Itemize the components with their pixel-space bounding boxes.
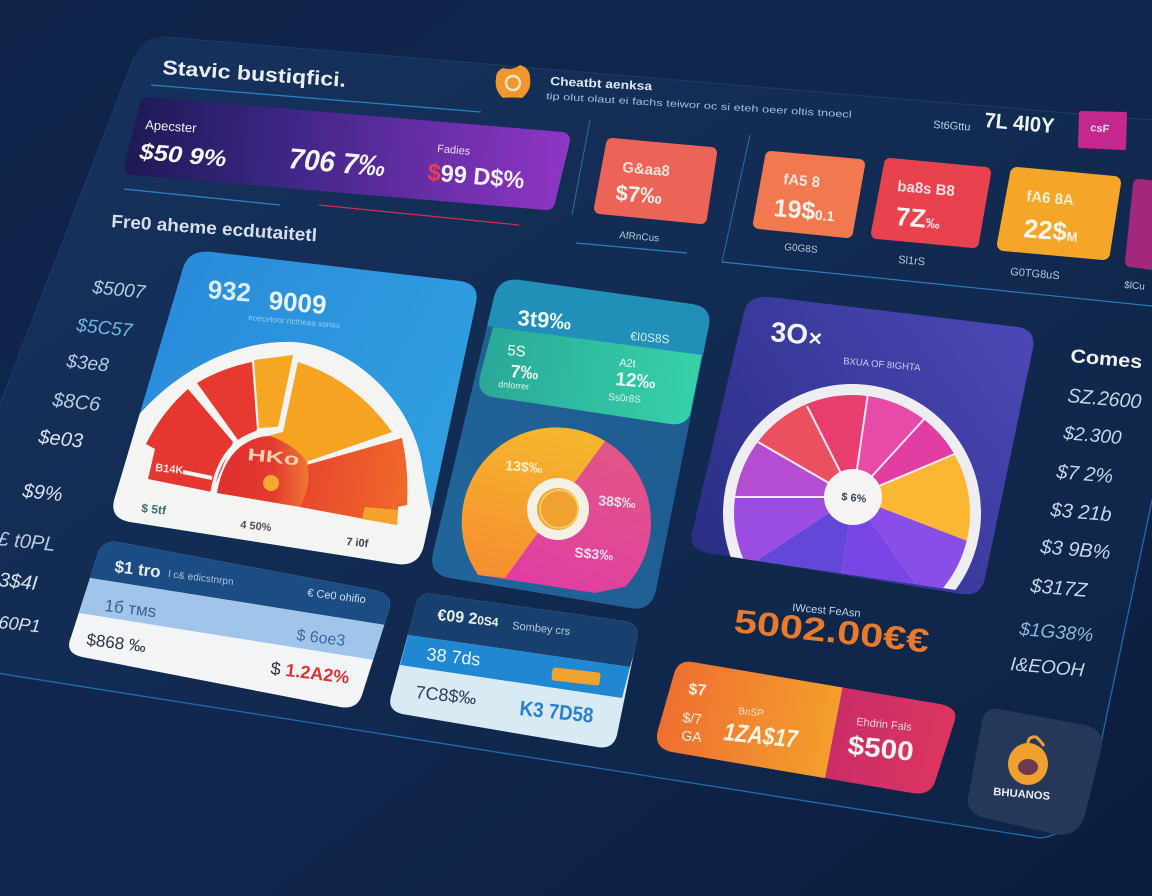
panel: purple wheel card: 3O✕ — [769, 316, 824, 352]
panel: gauge card: 9009 — [267, 285, 328, 320]
pie chart: 13$‰ — [505, 457, 543, 476]
metric card: red: ba8s B8 — [897, 178, 955, 200]
panel: donut column card: Ss0r8S — [608, 392, 642, 406]
panel: donut column card: €I0S8S — [630, 329, 670, 346]
panel: mid bottom card: 38 7ds — [426, 644, 481, 670]
panel: table card: $868 ‰ — [86, 630, 147, 656]
right value column: $3 9B% — [1039, 536, 1111, 564]
panel: gauge card — [113, 252, 477, 564]
title: Stavic bustiqfici. — [162, 57, 347, 92]
panel: table card: $ 6oe3 — [296, 627, 346, 650]
panel: gauge card: 4 50% — [240, 519, 272, 534]
pie chart: 38$‰ — [598, 492, 636, 511]
panel: orange and pink card: $/7 — [682, 709, 703, 727]
header group — [162, 57, 1125, 148]
panel: purple summary band: 706 7‰ — [287, 143, 387, 183]
panel: gauge card: HKo — [247, 445, 300, 469]
panel: table card: $ 1.2A2% — [270, 658, 350, 688]
panel: purple summary band — [132, 105, 562, 202]
panel: purple wheel card: BXUA OF 8IGHTA — [843, 356, 921, 374]
right value column: I&EOOH — [1010, 654, 1085, 681]
metric card: amber — [1004, 174, 1114, 282]
panel: gauge card: $ 5tf — [141, 501, 168, 518]
top teal strip — [487, 280, 710, 356]
panel: purple summary band: Apecster — [145, 117, 198, 136]
section heading: Fre0 aheme ecdutaitetl — [111, 211, 318, 245]
left value column — [0, 277, 148, 636]
panel: mid bottom card: K3 7D58 — [518, 697, 595, 728]
panel: mid bottom card — [390, 594, 638, 748]
metric card: red: 7Z‰ — [894, 201, 941, 235]
panel: donut column card: dnlorrer — [498, 379, 530, 392]
right value column: Comes — [1070, 346, 1143, 373]
panel: purple summary band: Fadies — [437, 143, 471, 158]
panel: orange and pink card: GA — [681, 727, 703, 745]
header value — [933, 109, 1055, 138]
panel: table card: l c& edicstnrpn — [168, 569, 234, 588]
divider lines — [124, 85, 687, 253]
gauge segment: red upper — [197, 362, 257, 440]
panel: mid bottom card: €09 20S4 — [437, 607, 500, 630]
metric card: orange: 19$0.1 — [772, 194, 836, 227]
panel: orange and pink card: Ehdrin Fals — [856, 716, 913, 734]
header caption: tip olut olaut ei fachs teiwor oc si eteh oeer oltis tnoecl — [546, 91, 852, 121]
panel: donut column card: A2t — [619, 357, 636, 370]
panel: orange and pink card: $7 — [688, 681, 707, 700]
big orange total: IWcest FeAsn — [792, 602, 861, 620]
metric card: coral — [600, 144, 711, 244]
panel: table card: € Ce0 ohifio — [307, 587, 366, 606]
orange pill — [554, 670, 598, 683]
right value column: $317Z — [1029, 575, 1089, 602]
left value column: $5C57 — [74, 315, 135, 342]
metric card: amber: 22$M — [1022, 213, 1079, 248]
gauge backing white — [113, 342, 431, 564]
panel: mid bottom card: 7C8$‰ — [415, 682, 477, 708]
icon: magenta badge: csF — [1090, 122, 1110, 136]
panel: donut column card: 12‰ — [615, 369, 656, 393]
panel: table card: $1 tro — [114, 557, 162, 582]
right value column: $3 21b — [1049, 499, 1112, 526]
panel: donut column card: 5S — [507, 342, 526, 361]
header caption — [546, 74, 852, 121]
panel: donut column card — [432, 280, 710, 609]
panel: orange and pink card: $500 — [846, 730, 915, 767]
metric card: magenta edge: $lCu — [1124, 280, 1145, 293]
panel: donut column card: 7‰ — [510, 361, 539, 383]
pie chart — [462, 427, 651, 593]
icon: apple — [1008, 737, 1048, 785]
panel: gauge card: B14K — [155, 462, 184, 477]
left value column: $e03 — [36, 426, 84, 453]
panel: gauge card: 7 i0f — [346, 536, 369, 550]
left value column: $5007 — [90, 277, 148, 304]
right value column: $7 2% — [1055, 461, 1114, 488]
left value column: $3e8 — [64, 351, 110, 376]
right value column: $2.300 — [1062, 423, 1123, 449]
gauge segment: amber narrow — [254, 355, 293, 428]
panel: purple summary band: $99 D$% — [426, 159, 525, 194]
gauge segment: red left — [146, 389, 233, 492]
metric card: amber: fA6 8A — [1026, 188, 1075, 209]
panel: table card: 1б тмs — [104, 596, 157, 621]
panel: purple summary band: $50 9% — [137, 138, 227, 172]
panel: orange and pink card: BnSP — [738, 706, 765, 720]
icon: orange badge — [496, 65, 530, 98]
metric card: magenta edge — [1124, 184, 1152, 293]
logo card: BHUANOS — [993, 786, 1051, 803]
panel: mid bottom card: Sombey crs — [512, 620, 571, 638]
gauge segment: right — [300, 438, 407, 525]
metric card: amber: G0TG8uS — [1010, 266, 1060, 282]
metric card: red: Sl1rS — [898, 254, 926, 268]
panel: purple wheel card — [691, 296, 1034, 594]
panel: donut column card: 3t9‰ — [517, 305, 572, 335]
metric card: coral: AfRnCus — [619, 230, 660, 244]
right value column: SZ.2600 — [1067, 385, 1142, 413]
green band — [479, 327, 702, 424]
metric card: orange: fA5 8 — [783, 171, 821, 191]
metric card: coral: G&aa8 — [622, 159, 670, 180]
big orange total: 5002.00€€ — [732, 602, 931, 659]
panel: table card — [69, 542, 390, 708]
logo card — [968, 709, 1102, 835]
metric card: orange: G0G8S — [784, 242, 818, 256]
right value column: $1G38% — [1018, 619, 1094, 646]
header value: 7L 4I0Y — [984, 109, 1055, 138]
wheel chart: $ 6% — [841, 491, 867, 506]
header value: St6Gttu — [933, 119, 971, 134]
wheel chart — [723, 384, 981, 590]
gauge segment: amber large — [268, 362, 392, 463]
left value column: $8C6 — [50, 389, 102, 416]
gauge center — [217, 436, 308, 507]
metric card: red — [877, 164, 985, 268]
pie chart: S$3‰ — [574, 544, 614, 563]
metric card: orange — [759, 157, 859, 256]
panel: gauge card: eoecetoor nctheaa sonas — [248, 313, 340, 330]
panel: gauge card: 932 — [206, 274, 252, 308]
metric card: coral: $7‰ — [615, 180, 663, 209]
panel: orange and pink card — [656, 662, 956, 794]
right value column — [1010, 346, 1143, 681]
panel: orange and pink card: 1ZA$17 — [722, 718, 800, 754]
left value column: $9% — [20, 480, 64, 506]
icon: magenta badge — [1080, 113, 1125, 148]
header caption: Cheatbt aenksa — [550, 74, 653, 93]
